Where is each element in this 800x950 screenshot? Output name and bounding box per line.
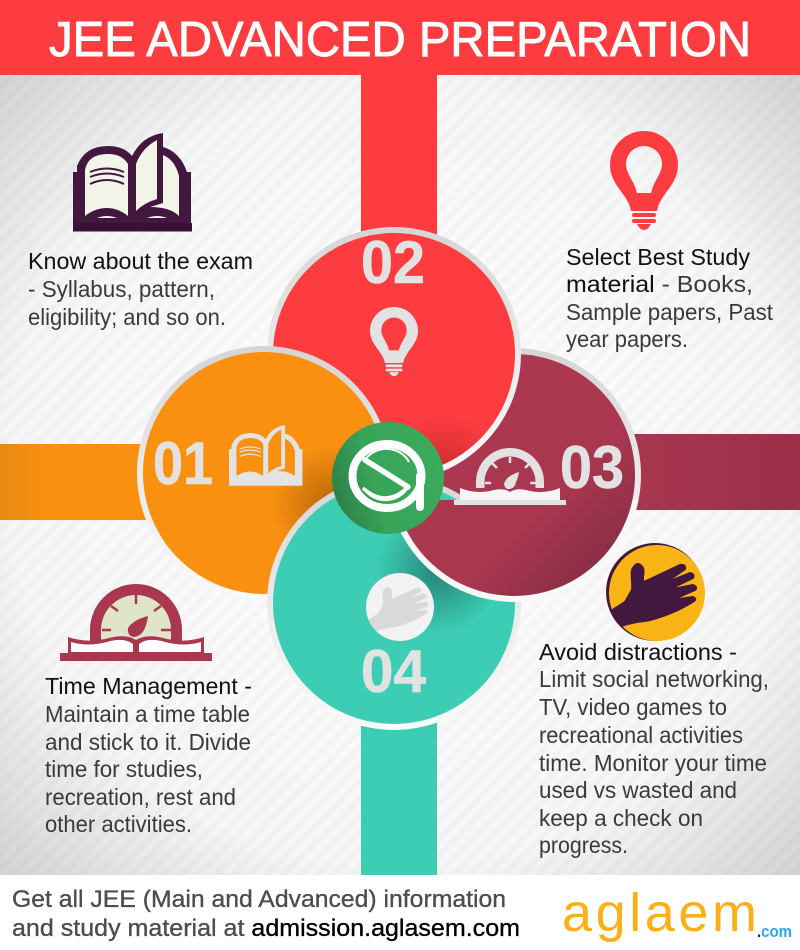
number 01: 01 — [153, 430, 213, 497]
text: time management: other activities. — [45, 811, 192, 837]
icon: small gauge in circle 03 — [454, 448, 566, 505]
text: avoid distractions — [539, 639, 769, 858]
text: time management — [45, 673, 252, 837]
brand wordmark: .com — [757, 922, 792, 941]
icon: big bulb — [610, 131, 678, 230]
number 02: 02 — [361, 229, 425, 296]
text: know about the exam: - Syllabus, pattern, — [28, 276, 215, 302]
text: avoid distractions: used vs wasted and — [539, 777, 737, 803]
text: time management: and stick to it. Divide — [45, 729, 251, 755]
band: teal bottom — [361, 720, 437, 875]
circle 01 orange — [137, 346, 391, 600]
band: red top — [361, 75, 437, 245]
text: avoid distractions: Avoid distractions - — [539, 639, 737, 665]
text: avoid distractions: TV, video games to — [539, 694, 727, 720]
number 04: 04 — [361, 638, 427, 705]
title banner: JEE ADVANCED PREPARATION — [49, 13, 751, 67]
footer text: Get all JEE (Main and Advanced) information — [12, 886, 506, 913]
text: know about the exam: eligibility; and so on. — [28, 304, 226, 330]
title banner — [0, 0, 800, 75]
text: time management: Maintain a time table — [45, 701, 250, 727]
text: time management: recreation, rest and — [45, 784, 236, 810]
logo badge — [332, 422, 444, 534]
text: select best study material: Sample papers, Past — [566, 299, 773, 325]
footer text — [12, 886, 520, 942]
text: time management: time for studies, — [45, 756, 203, 782]
text: select best study material: material - Books, — [566, 271, 753, 297]
text: select best study material: Select Best Study — [566, 244, 750, 270]
text: know about the exam: Know about the exam — [28, 248, 253, 274]
icon: hand on yellow circle — [600, 543, 705, 641]
text: time management: Time Management - — [45, 673, 252, 699]
number 03: 03 — [560, 434, 624, 501]
text: avoid distractions: progress. — [539, 832, 628, 858]
band: orange left — [0, 444, 150, 520]
text: avoid distractions: keep a check on — [539, 805, 703, 831]
band: maroon right — [630, 434, 800, 510]
text: avoid distractions: recreational activities — [539, 722, 743, 748]
text: avoid distractions: time. Monitor your time — [539, 750, 767, 776]
icon: small book in circle 01 — [229, 425, 302, 486]
brand wordmark: aglaem — [562, 883, 757, 943]
text: select best study material — [566, 244, 773, 352]
icon: small hand in circle 04 — [361, 573, 434, 641]
footer — [0, 875, 800, 950]
text: avoid distractions: Limit social networking, — [539, 666, 769, 692]
footer text: and study material at admission.aglasem.com — [12, 915, 520, 942]
icon: small bulb in circle 02 — [370, 307, 418, 376]
circle 02 red — [267, 227, 521, 481]
icon: big book — [73, 133, 192, 232]
icon: big gauge — [60, 584, 212, 661]
circle 04 teal — [267, 476, 521, 730]
text: select best study material: year papers. — [566, 326, 688, 352]
circle 03 maroon — [387, 348, 641, 602]
text: know about the exam — [28, 248, 253, 330]
